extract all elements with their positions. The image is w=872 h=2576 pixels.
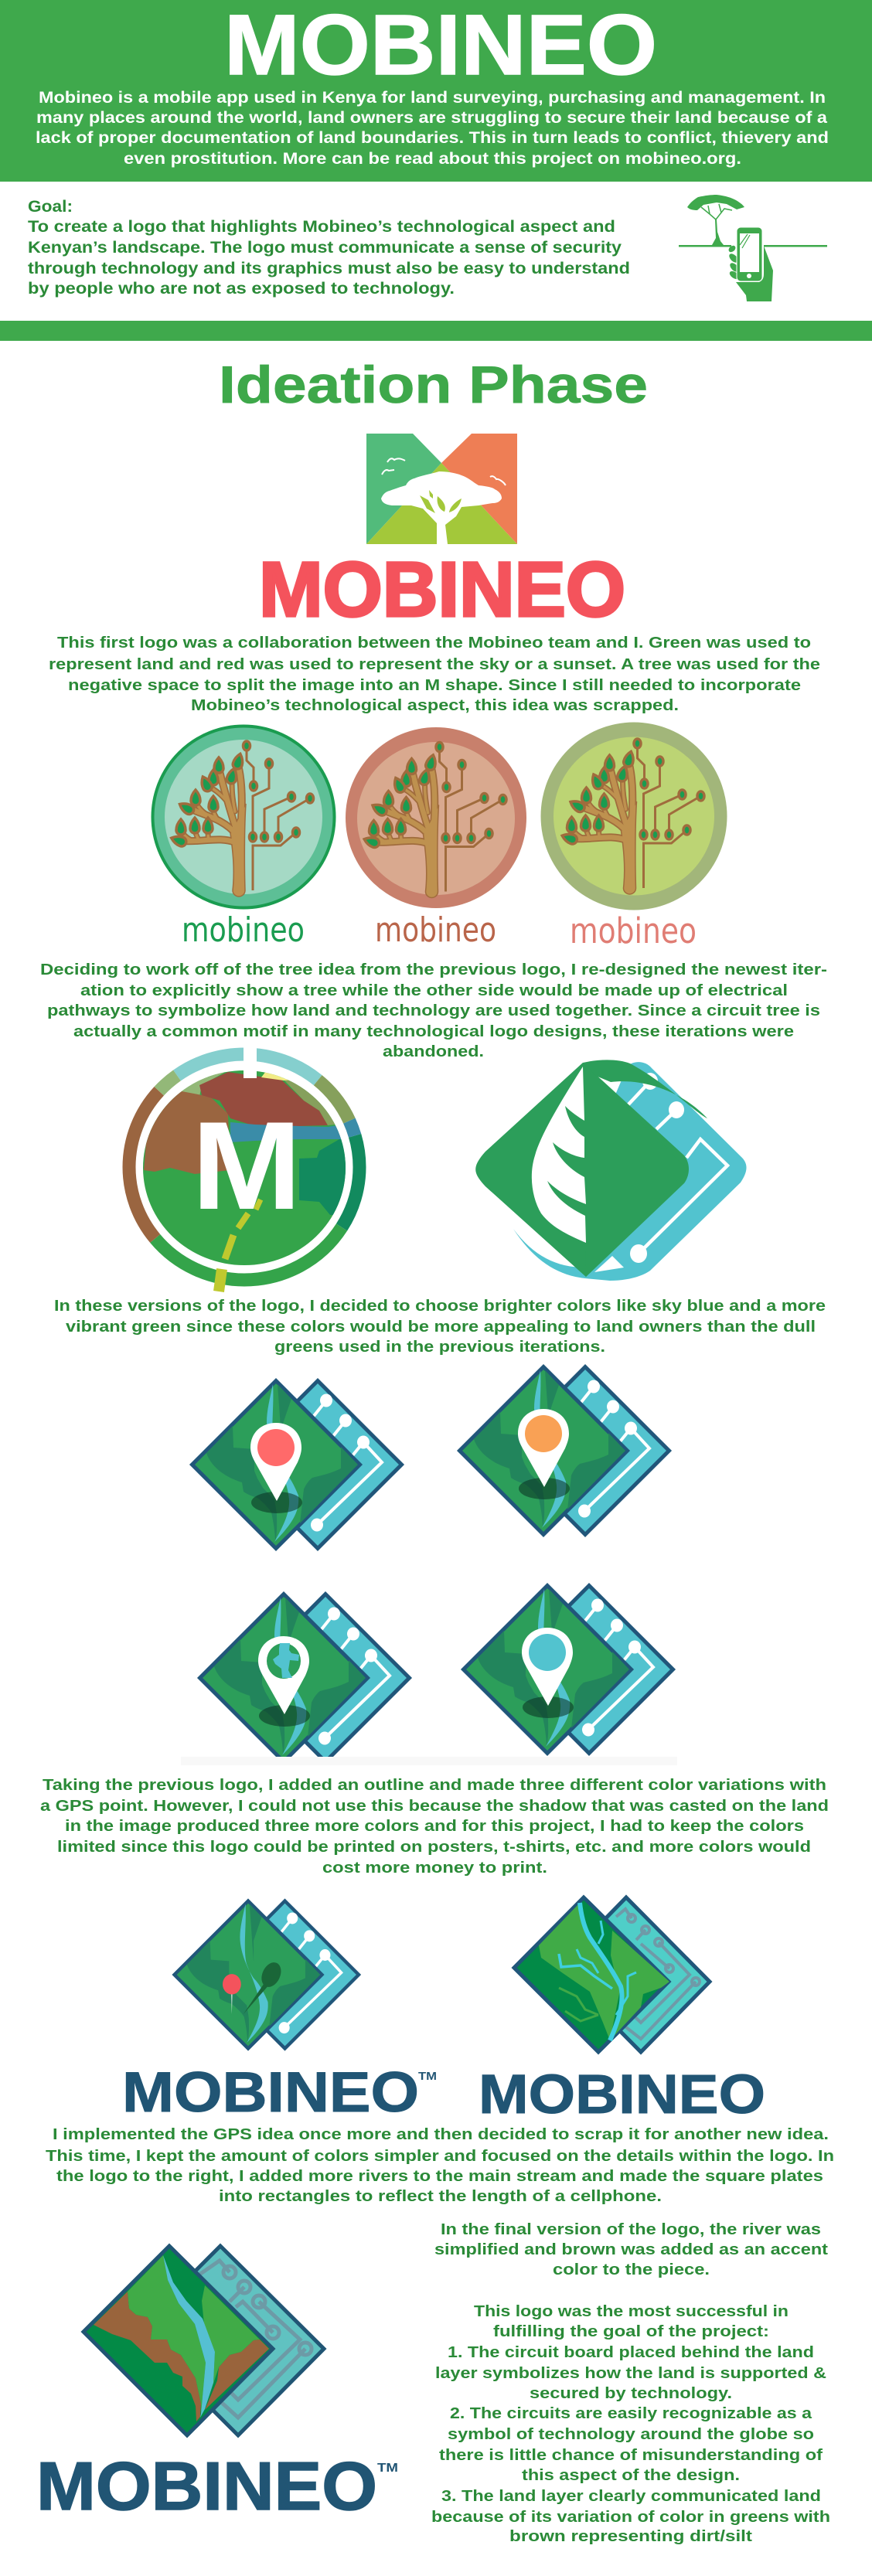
intro paragraph: many places around the world, land owners are struggling to secure their land because of a — [36, 109, 827, 127]
text: final version: symbol of technology around the globe so — [448, 2425, 814, 2443]
wordmark: pink mobineo: mobineo — [570, 910, 697, 951]
goal text: Goal: — [28, 198, 73, 216]
icon: hand — [736, 246, 773, 301]
logo: flat GPS with pushpin — [175, 1901, 359, 2048]
pin dot: orange — [525, 1415, 562, 1452]
logo: M landscape badge — [129, 1041, 359, 1291]
text: rivers: into rectangles to reflect the length of a cellphone. — [219, 2188, 662, 2205]
text: final version: simplified and brown was added as an accent — [434, 2241, 828, 2258]
text: first logo: negative space to split the image into an M shape. Since I still needed to incorporate — [68, 677, 801, 694]
text: rivers — [46, 2126, 834, 2205]
text: final version: secured by technology. — [530, 2384, 732, 2402]
header band — [0, 0, 872, 182]
goal text: through technology and its graphics must also be easy to understand — [28, 260, 630, 277]
goal text: Kenyan’s landscape. The logo must communicate a sense of security — [28, 239, 622, 257]
text: GPS colors: in the image produced three more colors and for this project, I had to keep the colors — [65, 1818, 804, 1835]
text: final version: In the final version of the logo, the river was — [441, 2220, 821, 2238]
logo: final — [83, 2246, 324, 2435]
text: brighter colors: vibrant green since these colors would be more appealing to land owners than the dull — [66, 1319, 816, 1336]
pushpin shadow — [244, 1959, 284, 2014]
text: final version: 3. The land layer clearly communicated land — [441, 2487, 821, 2505]
logo: GPS orange — [459, 1366, 669, 1535]
pin dot: red — [257, 1429, 295, 1466]
trademark: final: TM — [377, 2462, 398, 2475]
icon: phone — [737, 227, 762, 281]
logo: first M tree logo — [366, 434, 517, 544]
divider band — [0, 321, 872, 341]
text: final version: brown representing dirt/silt — [509, 2527, 752, 2545]
text: circuit tree: pathways to symbolize how land and technology are used together. Since a circuit tree is — [47, 1002, 820, 1019]
text: brighter colors — [54, 1298, 826, 1356]
text: GPS colors: a GPS point. However, I could not use this because the shadow that was casted on the land — [40, 1798, 829, 1815]
text: final version: because of its variation of color in greens with — [431, 2508, 830, 2526]
intro paragraph: Mobineo is a mobile app used in Kenya for land surveying, purchasing and management. In — [39, 89, 826, 107]
goal text: To create a logo that highlights Mobineo’s technological aspect and — [28, 218, 615, 236]
text: first logo — [49, 635, 820, 714]
logo wordmark: MOBINEO red: MOBINEO — [259, 546, 625, 633]
pin dot: globe — [267, 1643, 301, 1679]
text: brighter colors: greens used in the previous iterations. — [274, 1339, 605, 1356]
logo: rivers rectangles — [514, 1897, 710, 2052]
text: circuit tree: actually a common motif in many technological logo designs, these iterations were — [73, 1023, 794, 1040]
text: GPS colors: Taking the previous logo, I added an outline and made three different color variations with — [43, 1777, 826, 1794]
text: final version: fulfilling the goal of the project: — [493, 2322, 769, 2340]
text: final version: there is little chance of misunderstanding of — [439, 2446, 823, 2464]
goal text — [28, 198, 630, 298]
text: circuit tree: Deciding to work off of the tree idea from the previous logo, I re-designed the newest iter- — [40, 961, 827, 978]
text: circuit tree: abandoned. — [383, 1043, 484, 1060]
intro paragraph — [36, 89, 829, 168]
letter M: M — [192, 1096, 301, 1236]
text: rivers: the logo to the right, I added more rivers to the main stream and made the square plates — [56, 2168, 823, 2185]
heading: Ideation Phase: Ideation Phase — [219, 356, 648, 414]
intro paragraph: lack of proper documentation of land boundaries. This in turn leads to conflict, thievery and — [36, 129, 829, 147]
logo: circuit tree red — [346, 727, 526, 950]
text: first logo: represent land and red was used to represent the sky or a sunset. A tree was used for the — [49, 656, 820, 673]
text: GPS colors — [40, 1777, 829, 1877]
text: final version — [431, 2220, 830, 2545]
wordmark: final MOBINEO: MOBINEO — [36, 2448, 377, 2524]
logo: circuit tree lime — [541, 722, 727, 951]
intro paragraph: even prostitution. More can be read about this project on mobineo.org. — [124, 150, 741, 168]
logo: circuit tree green — [153, 727, 334, 950]
pushpin — [223, 1974, 241, 2014]
title: MOBINEO — [224, 0, 657, 93]
logo: GPS globe — [199, 1594, 410, 1762]
pin dot: teal — [529, 1634, 566, 1671]
text: GPS colors: cost more money to print. — [322, 1860, 547, 1877]
text: first logo: This first logo was a collaboration between the Mobineo team and I. Green was used to — [57, 635, 811, 652]
text: final version: 1. The circuit board placed behind the land — [448, 2343, 814, 2361]
goal text: by people who are not as exposed to technology. — [28, 280, 455, 298]
logo: GPS red — [192, 1380, 402, 1549]
logo: GPS teal — [464, 1586, 673, 1753]
text: circuit tree: ation to explicitly show a tree while the other side would be made up of electrical — [80, 982, 788, 999]
text: rivers: I implemented the GPS idea once more and then decided to scrap it for another new idea. — [53, 2126, 829, 2143]
text: first logo: Mobineo’s technological aspect, this idea was scrapped. — [191, 697, 679, 714]
text: final version: this aspect of the design. — [522, 2466, 740, 2484]
trademark: left: TM — [418, 2070, 437, 2083]
text: GPS colors: limited since this logo could be printed on posters, t-shirts, etc. and more colors would — [57, 1839, 811, 1856]
logo: leaf and circuit — [475, 1060, 747, 1281]
text: final version: This logo was the most successful in — [474, 2302, 789, 2320]
icon: tree and hand holding phone — [679, 195, 827, 301]
text: final version: 2. The circuits are easily recognizable as a — [450, 2404, 812, 2422]
text: circuit tree — [40, 961, 827, 1060]
road — [219, 1200, 261, 1291]
text: rivers: This time, I kept the amount of colors simpler and focused on the details within the logo. In — [46, 2148, 834, 2165]
text: brighter colors: In these versions of the logo, I decided to choose brighter colors like sky blue and a more — [54, 1298, 826, 1315]
text: final version: color to the piece. — [553, 2261, 710, 2278]
wordmark: green mobineo: mobineo — [182, 910, 305, 950]
wordmark: right MOBINEO: MOBINEO — [479, 2064, 765, 2125]
text: final version: layer symbolizes how the land is supported & — [435, 2364, 826, 2382]
wordmark: brown mobineo: mobineo — [375, 910, 496, 950]
wordmark: left MOBINEO: MOBINEO — [122, 2061, 419, 2124]
